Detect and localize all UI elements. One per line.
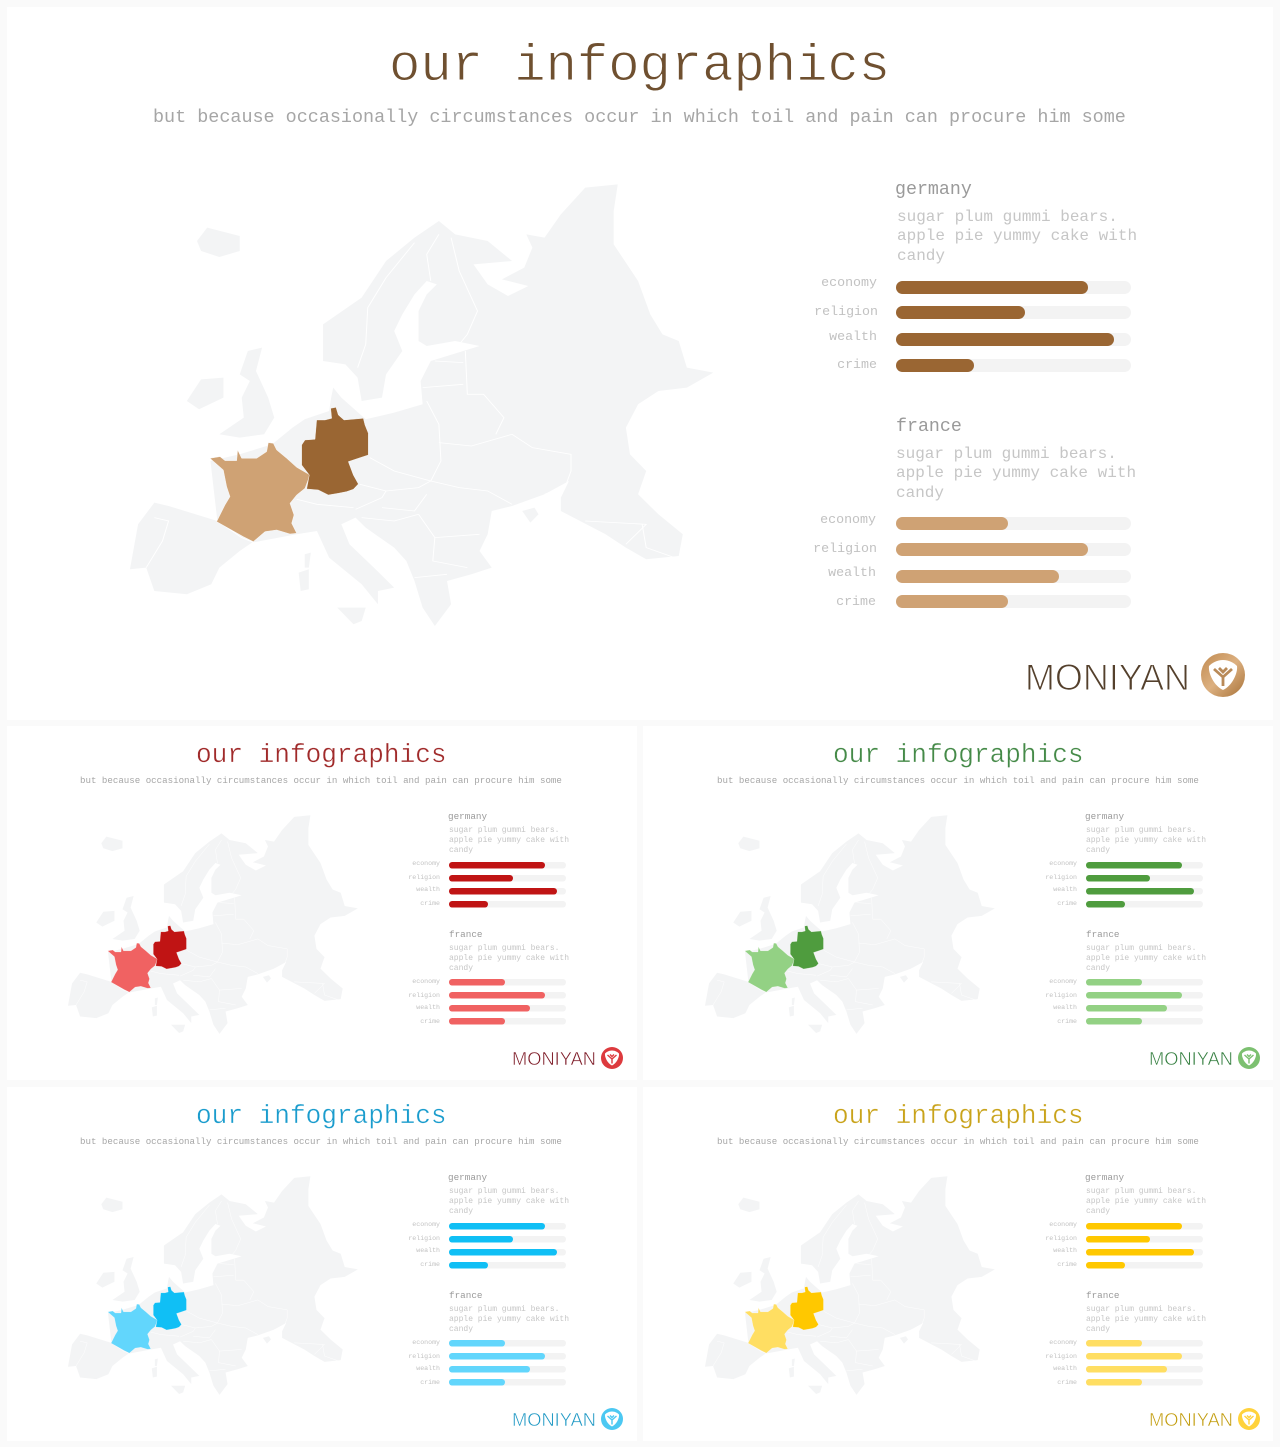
panel: main brown infographic bbox=[7, 7, 1273, 720]
yellow france block: religion bbox=[1045, 1353, 1077, 1360]
red france block: sugar plum gummi bears. bbox=[449, 944, 559, 953]
green germany block: economy bbox=[1049, 860, 1077, 867]
red germany block: germany bbox=[448, 811, 487, 822]
germany block: religion bbox=[814, 304, 878, 319]
title: our infographics bbox=[389, 37, 890, 96]
green map bbox=[705, 815, 995, 1034]
germany block: candy bbox=[897, 247, 945, 265]
red logo: MONIYAN bbox=[512, 1048, 596, 1069]
yellow map bbox=[705, 1176, 995, 1395]
yellow germany block: apple pie yummy cake with bbox=[1086, 1197, 1206, 1206]
blue france block: economy bbox=[412, 1339, 440, 1346]
green france block: religion bbox=[1045, 992, 1077, 999]
yellow germany block: candy bbox=[1086, 1207, 1110, 1216]
green france block: economy bbox=[1049, 978, 1077, 985]
blue france block: religion bbox=[408, 1353, 440, 1360]
yellow germany block: religion bbox=[1045, 1235, 1077, 1242]
red france block: crime bbox=[420, 1018, 440, 1025]
yellow france block: apple pie yummy cake with bbox=[1086, 1315, 1206, 1324]
blue france block: apple pie yummy cake with bbox=[449, 1315, 569, 1324]
france block: candy bbox=[896, 484, 944, 502]
map of europe bbox=[130, 184, 713, 626]
yellow germany block: sugar plum gummi bears. bbox=[1086, 1187, 1196, 1196]
logo: MONIYAN bbox=[1025, 656, 1190, 698]
green subtitle: but because occasionally circumstances occur in which toil and pain can procure him some bbox=[717, 775, 1199, 786]
green germany block: religion bbox=[1045, 874, 1077, 881]
green germany block: sugar plum gummi bears. bbox=[1086, 826, 1196, 835]
blue map bbox=[68, 1176, 358, 1395]
green france block bbox=[1045, 929, 1206, 1025]
germany block: apple pie yummy cake with bbox=[897, 227, 1137, 245]
blue france block: candy bbox=[449, 1325, 473, 1334]
blue title: our infographics bbox=[196, 1101, 447, 1131]
yellow germany block: economy bbox=[1049, 1221, 1077, 1228]
yellow logo: MONIYAN bbox=[1149, 1409, 1233, 1430]
red germany block: apple pie yummy cake with bbox=[449, 836, 569, 845]
blue germany block: economy bbox=[412, 1221, 440, 1228]
panel: yellow variant bbox=[643, 1087, 1273, 1441]
red subtitle: but because occasionally circumstances occur in which toil and pain can procure him some bbox=[80, 775, 562, 786]
germany block: wealth bbox=[829, 329, 877, 344]
yellow germany block: wealth bbox=[1053, 1247, 1077, 1254]
yellow france block: wealth bbox=[1053, 1365, 1077, 1372]
blue germany block: candy bbox=[449, 1207, 473, 1216]
green france block: crime bbox=[1057, 1018, 1077, 1025]
yellow germany block: germany bbox=[1085, 1172, 1124, 1183]
red germany block: sugar plum gummi bears. bbox=[449, 826, 559, 835]
red france block: wealth bbox=[416, 1004, 440, 1011]
blue germany block: religion bbox=[408, 1235, 440, 1242]
blue germany block: crime bbox=[420, 1261, 440, 1268]
france block: religion bbox=[813, 541, 877, 556]
panel: green variant bbox=[643, 726, 1273, 1080]
panel: red variant bbox=[7, 726, 637, 1080]
yellow title: our infographics bbox=[833, 1101, 1084, 1131]
green germany block: wealth bbox=[1053, 886, 1077, 893]
blue subtitle: but because occasionally circumstances occur in which toil and pain can procure him some bbox=[80, 1136, 562, 1147]
red france block: religion bbox=[408, 992, 440, 999]
germany block: crime bbox=[837, 357, 877, 372]
blue germany block: germany bbox=[448, 1172, 487, 1183]
blue france block bbox=[408, 1290, 569, 1386]
blue france block: wealth bbox=[416, 1365, 440, 1372]
red title: our infographics bbox=[196, 740, 447, 770]
red map bbox=[68, 815, 358, 1034]
panel: blue variant bbox=[7, 1087, 637, 1441]
red france block: apple pie yummy cake with bbox=[449, 954, 569, 963]
yellow france block: economy bbox=[1049, 1339, 1077, 1346]
yellow france block bbox=[1045, 1290, 1206, 1386]
red germany block: religion bbox=[408, 874, 440, 881]
germany block: economy bbox=[821, 275, 877, 290]
france block bbox=[813, 417, 1136, 609]
yellow germany block: crime bbox=[1057, 1261, 1077, 1268]
germany block: germany bbox=[895, 180, 972, 200]
red france block: economy bbox=[412, 978, 440, 985]
green france block: apple pie yummy cake with bbox=[1086, 954, 1206, 963]
yellow france block: sugar plum gummi bears. bbox=[1086, 1305, 1196, 1314]
green germany block: crime bbox=[1057, 900, 1077, 907]
blue france block: france bbox=[449, 1290, 482, 1301]
red france block bbox=[408, 929, 569, 1025]
subtitle: but because occasionally circumstances occur in which toil and pain can procure him some bbox=[153, 107, 1126, 128]
red france block: france bbox=[449, 929, 482, 940]
green france block: sugar plum gummi bears. bbox=[1086, 944, 1196, 953]
red germany block: economy bbox=[412, 860, 440, 867]
yellow france block: france bbox=[1086, 1290, 1119, 1301]
germany block: sugar plum gummi bears. bbox=[897, 208, 1118, 226]
germany block bbox=[814, 180, 1137, 372]
yellow france block: crime bbox=[1057, 1379, 1077, 1386]
blue germany block: apple pie yummy cake with bbox=[449, 1197, 569, 1206]
red germany block: crime bbox=[420, 900, 440, 907]
green france block: candy bbox=[1086, 964, 1110, 973]
green germany block: germany bbox=[1085, 811, 1124, 822]
france block: economy bbox=[820, 512, 876, 527]
green title: our infographics bbox=[833, 740, 1084, 770]
blue logo: MONIYAN bbox=[512, 1409, 596, 1430]
blue france block: sugar plum gummi bears. bbox=[449, 1305, 559, 1314]
blue france block: crime bbox=[420, 1379, 440, 1386]
green germany block: candy bbox=[1086, 846, 1110, 855]
green germany block bbox=[1045, 811, 1206, 908]
red germany block bbox=[408, 811, 569, 908]
yellow france block: candy bbox=[1086, 1325, 1110, 1334]
blue germany block: sugar plum gummi bears. bbox=[449, 1187, 559, 1196]
blue germany block: wealth bbox=[416, 1247, 440, 1254]
green logo: MONIYAN bbox=[1149, 1048, 1233, 1069]
france block: wealth bbox=[828, 565, 876, 580]
red germany block: wealth bbox=[416, 886, 440, 893]
france block: sugar plum gummi bears. bbox=[896, 445, 1117, 463]
france block: crime bbox=[836, 594, 876, 609]
green germany block: apple pie yummy cake with bbox=[1086, 836, 1206, 845]
green france block: france bbox=[1086, 929, 1119, 940]
green france block: wealth bbox=[1053, 1004, 1077, 1011]
yellow subtitle: but because occasionally circumstances occur in which toil and pain can procure him some bbox=[717, 1136, 1199, 1147]
blue germany block bbox=[408, 1172, 569, 1268]
yellow germany block bbox=[1045, 1172, 1206, 1268]
red germany block: candy bbox=[449, 846, 473, 855]
france block: france bbox=[896, 417, 962, 437]
france block: apple pie yummy cake with bbox=[896, 464, 1136, 482]
red france block: candy bbox=[449, 964, 473, 973]
